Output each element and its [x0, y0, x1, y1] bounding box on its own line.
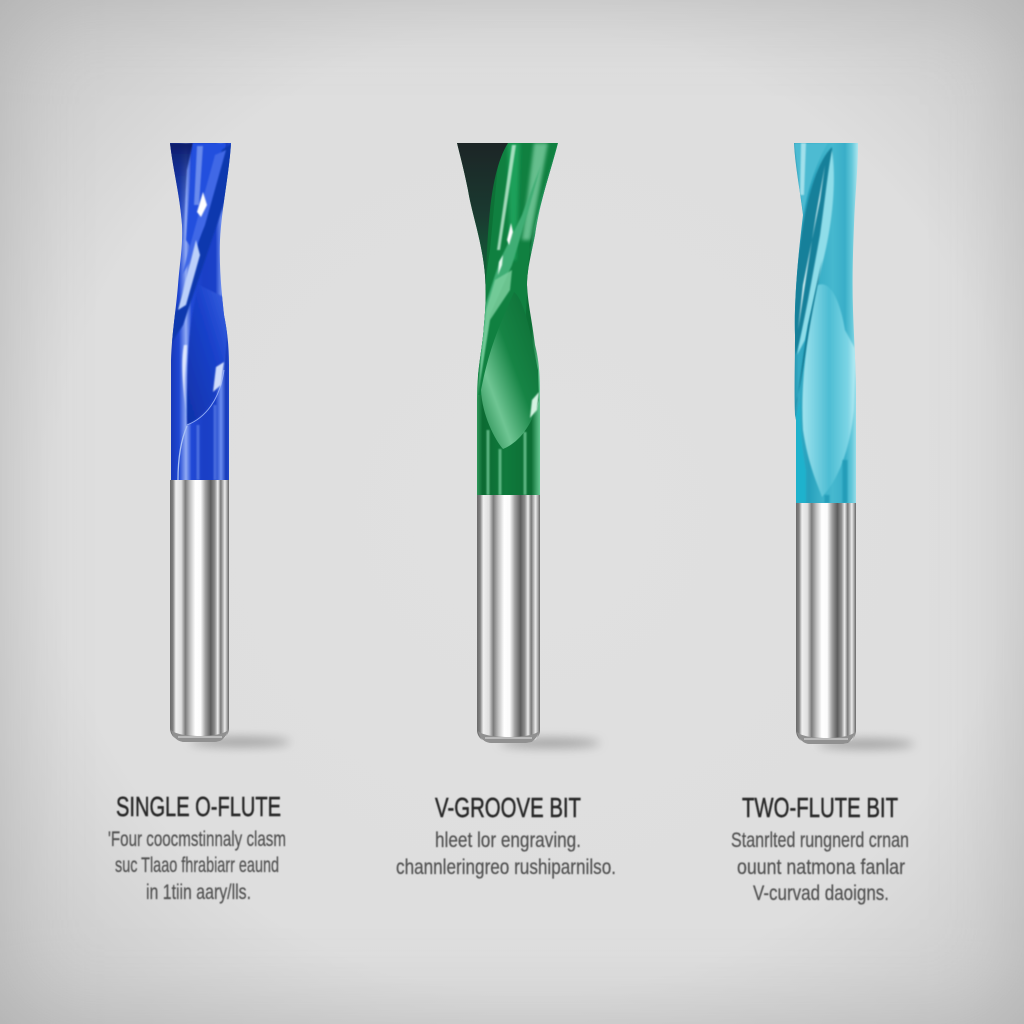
green fluted body: [455, 140, 561, 498]
description: Stanrlted rungnerd crnan: [731, 829, 909, 852]
description: [396, 829, 616, 879]
router bit: two-flute (cyan): [792, 140, 914, 748]
description: hleet lor engraving.: [435, 829, 581, 852]
heading: V-GROOVE BIT: [435, 792, 581, 823]
router bit: single O-flute (blue): [165, 140, 290, 746]
caption: two-flute bit: [731, 792, 909, 905]
silver shank: [477, 495, 540, 743]
floor shadow: [500, 738, 600, 748]
floor shadow: [190, 738, 290, 746]
description: V-curvad daoigns.: [753, 882, 889, 905]
heading: TWO-FLUTE BIT: [742, 792, 898, 823]
router bit: V-groove (green): [455, 140, 600, 748]
description: ouunt natmona fanlar: [737, 856, 905, 879]
heading: SINGLE O-FLUTE: [116, 791, 281, 822]
caption: V-groove bit: [396, 792, 616, 879]
description: 'Four coocmstinnaly clasm: [108, 828, 286, 851]
silver shank: [796, 503, 856, 744]
cyan fluted body: [792, 140, 860, 505]
floor shadow: [818, 740, 914, 748]
caption: single O-flute: [108, 791, 286, 904]
blue fluted body: [170, 143, 231, 480]
description: [108, 828, 286, 904]
description: channleringreo rushiparnilso.: [396, 856, 616, 879]
silver shank: [170, 480, 229, 742]
description: in 1tiin aary/lls.: [146, 881, 251, 904]
description: suc Tlaao fhrabiarr eaund: [115, 854, 279, 877]
description: [731, 829, 909, 905]
